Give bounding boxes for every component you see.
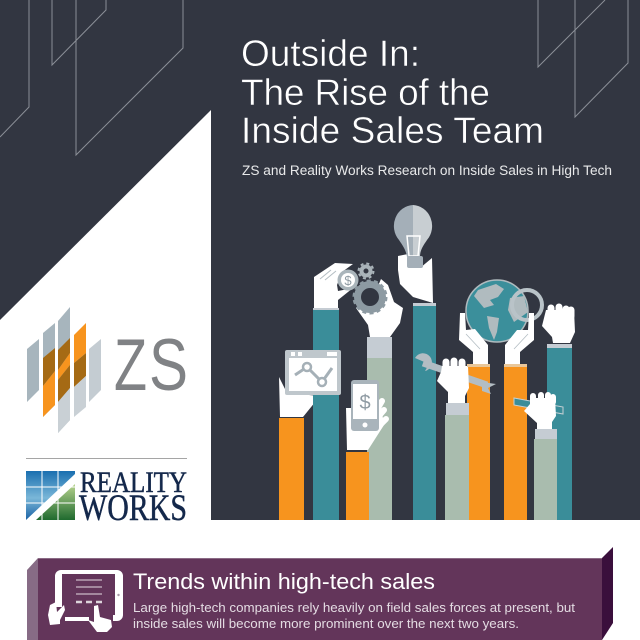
title: The Rise of the xyxy=(241,72,490,113)
arm: dollar coin hand: $ xyxy=(344,273,352,288)
ZS logo xyxy=(27,307,188,433)
arm: light bulb hand xyxy=(394,205,436,520)
ZS logo: S xyxy=(149,325,188,406)
heading: Trends within high-tech sales xyxy=(133,569,435,594)
ZS logo: Z xyxy=(114,325,147,406)
title: Inside Sales Team xyxy=(241,110,544,151)
arm: fist and pen hand xyxy=(514,307,575,520)
arm: chart hand xyxy=(279,377,320,520)
panel: trends banner xyxy=(27,547,613,640)
Reality Works logo: REALITY xyxy=(80,466,187,499)
arm: phone hand xyxy=(346,380,386,520)
arm: dollar coin hand xyxy=(313,263,358,520)
arm: wrench hand xyxy=(415,353,496,520)
body text: inside sales will become more prominent over the next two years. xyxy=(133,617,519,631)
body text: Large high-tech companies rely heavily on field sales forces at present, but xyxy=(133,601,576,615)
arm: phone hand: $ xyxy=(359,392,371,414)
Reality Works logo: WORKS xyxy=(79,488,187,529)
arm: globe hands xyxy=(459,280,542,520)
white logo panel xyxy=(0,110,211,520)
subtitle: ZS and Reality Works Research on Inside Sales in High Tech xyxy=(242,163,612,178)
arm: chart window xyxy=(285,350,341,395)
title xyxy=(241,33,544,151)
arm: gear hand xyxy=(354,264,403,520)
title: Outside In: xyxy=(241,33,420,74)
icon: tablet with hand xyxy=(48,570,123,632)
body text xyxy=(133,601,576,631)
raised arms with hands and tools xyxy=(279,205,575,520)
Reality Works logo xyxy=(26,466,187,529)
